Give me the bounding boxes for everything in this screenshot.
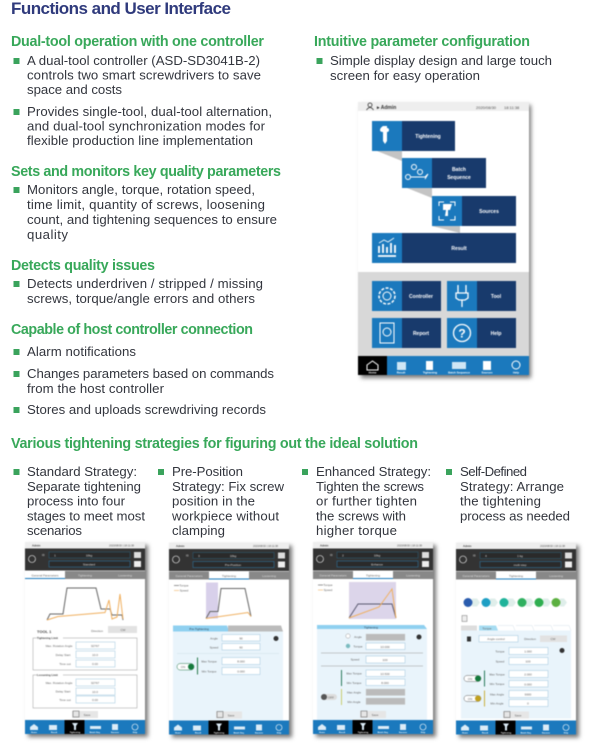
bullet: simple display (316, 53, 552, 83)
bottom navigation: Result (397, 370, 405, 374)
tabs: Loosening (549, 574, 563, 578)
bottom navigation: Tightening (70, 731, 81, 734)
bullet: simple display: Simple display design and large touch (330, 53, 552, 68)
tool direction: TOOL 1 (37, 629, 52, 634)
step panel: Max Torque (489, 672, 505, 676)
strategy: pre-position: workpiece without (171, 508, 279, 524)
tile: help: Help (491, 331, 501, 337)
parameter panel: OFF (328, 696, 334, 700)
bottom navigation: Result (482, 732, 488, 734)
parameter panel: Speed (210, 646, 219, 650)
legend: Torque (323, 583, 333, 587)
bottom navigation: Home (319, 732, 326, 734)
step panel: Min Angle (490, 702, 504, 706)
header: 3 (198, 554, 200, 558)
tool direction (37, 626, 137, 634)
tabs: General Parameters (31, 574, 59, 578)
loosening limit: Time out (59, 698, 71, 702)
parameter panel: 8.000 (381, 681, 389, 685)
tabs: General Parameters (175, 574, 203, 578)
strategy: standard: stages to meet most (27, 508, 145, 524)
heading: dual-tool: Dual-tool operation with one controller (11, 34, 264, 50)
strategy: enhanced: or further tighten (316, 494, 417, 508)
section: intuitive configuration (314, 34, 552, 83)
strategy: self-defined: Self-Defined (460, 464, 527, 479)
header: 1 kg (517, 554, 523, 558)
bottom navigation: Batch Seq. (90, 731, 101, 734)
header: 2020/08/30 | 18:11:38 (397, 544, 423, 548)
tile: batch sequence (402, 158, 486, 188)
heading: host controller: Capable of host controller connection (11, 322, 253, 338)
header: ID (186, 554, 189, 558)
step panel: Torque (495, 650, 505, 654)
bullet: detects (14, 276, 263, 306)
tabs: General Parameters (462, 574, 490, 578)
tightening limit (33, 636, 137, 670)
curve chart (349, 582, 396, 619)
step panel (461, 616, 571, 718)
parameter panel: Max Torque (201, 660, 217, 664)
bottom navigation: Batch Sequence (448, 370, 470, 374)
bullet: monitors: time limit, quantity of screws, loosening (27, 197, 265, 212)
header: 2020/08/30 | 18:11:38 (253, 544, 279, 548)
tabs: Loosening (262, 574, 276, 578)
header (169, 542, 289, 571)
section: dual-tool operation (11, 34, 272, 148)
tightening limit: Delay Start (56, 653, 71, 657)
strategy: enhanced: the screws with (316, 508, 406, 524)
parameter panel: 10.500 (380, 672, 390, 676)
tabs (169, 572, 289, 580)
bottom navigation: Tightening (501, 732, 512, 734)
bullet: dual-tool controller: space and costs (27, 82, 122, 97)
header: Enhance (371, 562, 383, 566)
strategy: pre-position (158, 464, 284, 538)
header (25, 542, 145, 570)
bottom navigation: Batch Seq. (521, 732, 532, 734)
bottom navigation: Result (195, 732, 201, 734)
step panel: Speed (496, 660, 505, 664)
header: multi step (514, 563, 527, 567)
tile: batch sequence: Sequence (447, 175, 471, 181)
bottom navigation: Result (339, 731, 345, 734)
parameter panel: Angle (210, 636, 218, 640)
tile: batch sequence: Batch (452, 167, 466, 173)
strategy: standard (14, 464, 145, 538)
loosening limit: Max. Rotation Angle (46, 681, 73, 685)
bullet: changes parameters (14, 366, 274, 396)
bullet: stores: Stores and uploads screwdriving records (27, 402, 266, 417)
bottom navigation: Tightening (423, 370, 437, 374)
tile: help (447, 318, 516, 348)
tightening limit: 0.00 (92, 662, 98, 666)
strategy: pre-position: position in the (172, 494, 255, 508)
header: 10kg (374, 554, 381, 558)
bottom navigation: Sources (255, 732, 264, 734)
tightening limit: Max. Rotation Angle (46, 644, 73, 648)
header: 4 (485, 554, 487, 558)
parameter panel (173, 626, 283, 720)
tabs: Tightening (78, 574, 92, 578)
tile: tightening: Tightening (415, 134, 441, 140)
legend: Torque (179, 584, 189, 588)
tabs (313, 571, 433, 579)
save button: Save (515, 714, 522, 718)
tightening limit: 10.0 (92, 653, 98, 657)
bottom navigation: Help (277, 732, 282, 734)
header (456, 542, 576, 571)
top bar (358, 102, 529, 111)
strategy: enhanced: Enhanced Strategy: (316, 464, 431, 479)
step panel: 9000 (525, 692, 532, 696)
tabs (456, 572, 576, 580)
tile: controller: Controller (409, 294, 433, 300)
header (313, 542, 433, 570)
parameter panel: Min Torque (202, 670, 217, 674)
save button: Save (228, 714, 235, 718)
bullet: modes: flexible production line implementation (27, 133, 253, 148)
parameter panel: Tightening (364, 626, 378, 630)
header: 1 (54, 554, 56, 558)
step panel: Min Torque (490, 682, 505, 686)
bullet: modes: and dual-tool synchronization modes for (27, 118, 266, 134)
header: 2020/08/30 | 18:11:38 (109, 544, 135, 548)
tile: report (372, 318, 441, 348)
bottom navigation (358, 356, 529, 375)
bullet: dual-tool controller: controls two smart screwdrivers to save (27, 68, 261, 82)
step panel: ON (468, 697, 472, 701)
step panel: ON (468, 677, 472, 681)
step panel: 2.000 (524, 672, 532, 676)
strategy: enhanced: Tighten the screws (316, 479, 424, 494)
step panel: CW (550, 637, 556, 641)
step sequence (464, 598, 567, 607)
step panel: Max Angle (490, 692, 504, 696)
strategy: self-defined: Strategy: Arrange (460, 479, 564, 494)
bullet: detects: Detects underdriven / stripped / missing (27, 276, 263, 291)
parameter panel: 100 (382, 658, 388, 662)
heading: quality parameters: Sets and monitors key quality parameters (11, 164, 281, 180)
parameter panel: 0.000 (237, 670, 245, 674)
bottom navigation: Home (369, 370, 377, 374)
curve chart (47, 588, 123, 620)
loosening limit: 32767 (91, 681, 100, 685)
bottom navigation: Home (31, 732, 38, 734)
tool direction: Direction (91, 629, 103, 633)
save button (503, 712, 529, 718)
tile: tool: Tool (491, 294, 502, 300)
tightening limit: 32767 (91, 644, 100, 648)
step panel: 100 (525, 660, 531, 664)
tile: help: ? (458, 326, 466, 340)
loosening limit: Delay Start (56, 690, 71, 694)
bottom navigation: Help (421, 732, 426, 734)
heading: tightening strategies: Various tightening strategies for figuring out the ideal solution (11, 436, 418, 452)
tabs (25, 571, 145, 579)
loosening limit: 0.00 (92, 698, 98, 702)
header: 10kg (230, 554, 237, 558)
parameter panel: Speed (351, 658, 360, 662)
bottom navigation: Batch Seq. (234, 732, 245, 734)
strategy: standard: Separate tightening (27, 479, 141, 494)
step panel: 0 (527, 702, 529, 706)
legend (318, 583, 333, 592)
parameter panel: Pre-Tightening (189, 627, 209, 631)
loosening limit: 10.0 (92, 690, 98, 694)
bottom navigation: Sources (481, 370, 493, 374)
bottom navigation (456, 720, 576, 734)
curve chart (206, 582, 251, 618)
parameter panel: 60 (239, 646, 243, 650)
bottom navigation: Batch Seq. (378, 731, 389, 734)
top bar: ▸ Admin (376, 105, 396, 111)
top bar: 2020/08/30 (476, 105, 497, 110)
bottom navigation: Help (513, 370, 519, 374)
screen: enhanced strategy (313, 542, 436, 737)
heading: quality issues: Detects quality issues (11, 258, 155, 274)
legend: Speed (324, 588, 333, 592)
header: ID (473, 554, 476, 558)
header: Pre-Position (225, 563, 242, 567)
tile: result (372, 233, 516, 263)
bullet: monitors: Monitors angle, torque, rotation speed, (27, 182, 255, 197)
loosening limit (33, 673, 137, 708)
strategy: enhanced: higher torque (316, 523, 397, 538)
tile: report: Report (413, 331, 429, 337)
save button (216, 712, 242, 718)
parameter panel: 90 (239, 636, 243, 640)
tile: tool (447, 281, 516, 311)
bullet: monitors (14, 182, 277, 242)
save button (72, 711, 98, 718)
strategy: standard: Standard Strategy: (27, 464, 137, 479)
parameter panel: Min Angle (347, 700, 361, 704)
tabs: Tightening (509, 574, 523, 578)
bullet: modes: Provides single-tool, dual-tool alternation, (27, 104, 272, 119)
bottom navigation: Home (462, 732, 469, 734)
header: 2020/08/30 | 18:11:38 (540, 544, 566, 548)
bottom navigation: Sources (399, 731, 408, 734)
header: Admin (463, 544, 472, 548)
screen: pre-position strategy (169, 542, 292, 738)
header: Admin (176, 544, 185, 548)
strategy: pre-position: Pre-Position (172, 464, 243, 479)
parameter panel: 10.000 (380, 645, 390, 649)
bullet: simple display: screen for easy operation (330, 68, 480, 83)
strategy: pre-position: clamping (172, 523, 225, 538)
bullet: changes parameters: from the host controller (27, 381, 165, 396)
header: Standard (83, 562, 95, 566)
parameter panel: Torque (353, 644, 363, 648)
save button: Save (372, 713, 379, 717)
section: quality issues (11, 258, 263, 306)
gray menu area (358, 272, 529, 356)
parameter panel: 8.000 (237, 660, 245, 664)
step panel: 0.000 (524, 682, 532, 686)
tabs: Loosening (118, 574, 132, 578)
bottom navigation: Help (564, 732, 569, 734)
legend (174, 584, 189, 592)
tightening limit: Tightening Limit (37, 636, 58, 640)
bottom navigation (313, 720, 433, 734)
strategy: standard: process into four (27, 494, 126, 508)
strategy: self-defined (446, 464, 570, 524)
bottom navigation: Sources (111, 731, 120, 734)
bottom navigation: Home (175, 732, 182, 734)
tile: tightening (372, 121, 455, 151)
tabs: General Parameters (319, 574, 347, 578)
bottom navigation: Tightening (358, 731, 369, 734)
heading: intuitive: Intuitive parameter configuration (314, 34, 530, 50)
step panel: Torque (482, 626, 492, 630)
strategy: pre-position: Strategy: Fix screw (172, 479, 284, 494)
strategy: self-defined: process as needed (460, 508, 570, 524)
step panel: Direction (524, 637, 536, 641)
bottom navigation (169, 720, 289, 734)
bullet: alarm: Alarm notifications (27, 344, 136, 359)
bottom navigation (25, 720, 145, 734)
parameter panel: Angle (354, 635, 362, 639)
bullet: modes (14, 104, 272, 148)
loosening limit: Loosening Limit (37, 673, 58, 677)
header: ID (330, 553, 333, 557)
strategy: enhanced (302, 464, 431, 538)
bullet: dual-tool controller (14, 53, 261, 97)
bullet: dual-tool controller: A dual-tool controller (ASD-SD3041B-2) (27, 53, 260, 68)
bullet: detects: screws, torque/angle errors and others (27, 291, 255, 306)
parameter panel (317, 625, 427, 720)
section: quality parameters (11, 164, 281, 242)
step panel: 1.000 (524, 650, 532, 654)
tool direction: CW (120, 628, 126, 632)
save button (360, 711, 386, 718)
header: Admin (320, 544, 329, 548)
bottom navigation: Tightening (214, 732, 225, 734)
tightening limit: Time out (59, 662, 71, 666)
screen: self-defined strategy (456, 542, 579, 738)
header: 10kg (86, 554, 93, 558)
header: ID (42, 553, 45, 557)
header: 2 (342, 554, 344, 558)
bullet: changes parameters: Changes parameters based on commands (27, 366, 274, 381)
parameter panel: Min Torque (347, 681, 362, 685)
tabs: Tightening (366, 574, 380, 578)
parameter panel: ON (181, 665, 185, 669)
parameter panel: Max Angle (347, 690, 361, 694)
tile: controller (372, 281, 441, 311)
bottom navigation: Result (51, 731, 57, 734)
bottom navigation: Sources (542, 732, 551, 734)
tile: sources: Sources (479, 209, 499, 215)
header: Admin (32, 544, 41, 548)
tabs: Loosening (406, 574, 420, 578)
tile: sources (432, 196, 516, 226)
strategy: standard: scenarios (27, 523, 82, 538)
top bar: 18:11:38 (504, 105, 520, 110)
section: host controller (11, 322, 274, 417)
bullet: monitors: quality (27, 227, 68, 242)
step panel: Angle control (487, 637, 505, 641)
bullet: monitors: count, and tightening sequences to ensure (27, 212, 277, 227)
tabs: Tightening (222, 574, 236, 578)
parameter panel: Max Torque (346, 672, 362, 676)
strategy: self-defined: the tightening (460, 494, 541, 508)
save button: Save (84, 713, 91, 717)
tile: result: Result (451, 246, 467, 252)
main touch screen (358, 102, 531, 378)
bottom navigation: Help (133, 732, 138, 734)
screen: standard strategy (25, 542, 148, 737)
legend: Speed (180, 588, 189, 592)
